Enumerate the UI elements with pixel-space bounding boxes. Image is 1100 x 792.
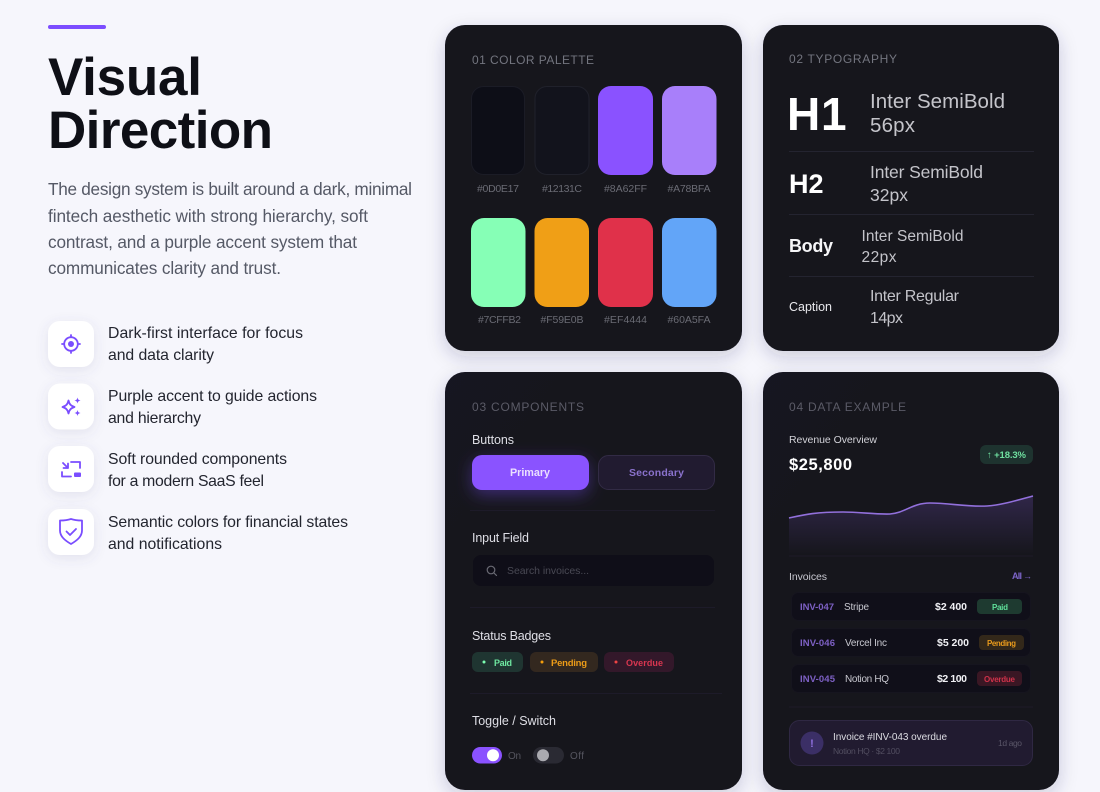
H2 row: H2 bbox=[789, 169, 824, 199]
title: Direction bbox=[48, 101, 273, 160]
swatch #60A5FA: #60A5FA bbox=[668, 314, 710, 326]
primary button bbox=[472, 455, 589, 490]
H1 row: 56px bbox=[870, 114, 916, 137]
area line chart bbox=[789, 496, 1033, 555]
icon: sparkles bbox=[48, 384, 94, 430]
badge: overdue bbox=[604, 652, 674, 672]
badge: overdue: Overdue bbox=[626, 658, 663, 668]
invoices header: All → bbox=[1012, 571, 1032, 581]
swatch #12131C: #12131C bbox=[542, 183, 582, 195]
swatch #0D0E17: #0D0E17 bbox=[477, 183, 519, 195]
invoice row INV-047: INV-047 bbox=[800, 602, 834, 613]
overdue notification: Notion HQ · $2 100 bbox=[833, 746, 900, 756]
badge: pending: Pending bbox=[551, 658, 587, 669]
status badges group: Status Badges bbox=[472, 629, 551, 643]
invoice row INV-045: INV-045 bbox=[800, 674, 836, 685]
feature text bbox=[108, 325, 303, 364]
status badges group bbox=[472, 629, 674, 672]
revenue label: Revenue Overview bbox=[789, 434, 877, 446]
accent bar bbox=[48, 25, 106, 29]
overdue notification: 1d ago bbox=[998, 738, 1022, 748]
feature text: and data clarity bbox=[108, 347, 214, 364]
Body row: 22px bbox=[862, 249, 897, 266]
invoices header: Invoices bbox=[789, 571, 827, 583]
Body row bbox=[789, 228, 964, 266]
panel heading: 03 COMPONENTS bbox=[472, 400, 584, 414]
swatch #F59E0B bbox=[534, 218, 589, 326]
feature: rounded components bbox=[48, 446, 287, 492]
feature text bbox=[108, 514, 348, 553]
secondary button bbox=[598, 456, 714, 490]
panel heading: 02 TYPOGRAPHY bbox=[789, 52, 897, 66]
alert icon: ! bbox=[810, 738, 814, 750]
invoice row INV-045: Notion HQ bbox=[845, 674, 889, 685]
invoice row INV-047: Paid bbox=[992, 603, 1008, 612]
Caption row bbox=[789, 288, 960, 327]
feature text: and notifications bbox=[108, 536, 222, 553]
invoice row INV-045 bbox=[792, 664, 1030, 692]
secondary button: Secondary bbox=[629, 467, 684, 479]
invoice row INV-046: INV-046 bbox=[800, 638, 835, 649]
swatch #0D0E17 bbox=[472, 86, 524, 195]
revenue value: $25,800 bbox=[789, 456, 852, 474]
panel: components bbox=[445, 372, 742, 790]
swatch #F59E0B: #F59E0B bbox=[540, 314, 584, 326]
intro paragraph: contrast, and a purple accent system that bbox=[48, 232, 357, 252]
overdue notification bbox=[790, 720, 1032, 766]
feature: purple accent bbox=[48, 384, 317, 430]
title bbox=[48, 48, 273, 160]
badge: pending bbox=[530, 652, 598, 672]
feature text bbox=[108, 388, 317, 427]
swatch #7CFFB2 bbox=[471, 218, 526, 326]
H1 row bbox=[787, 88, 1005, 140]
panel: data example bbox=[763, 372, 1059, 790]
feature text bbox=[108, 451, 287, 490]
buttons group: Buttons bbox=[472, 433, 514, 447]
intro paragraph: fintech aesthetic with strong hierarchy, soft bbox=[48, 206, 368, 226]
intro paragraph bbox=[48, 179, 412, 278]
panel heading: 04 DATA EXAMPLE bbox=[789, 400, 906, 414]
toggle group: Toggle / Switch bbox=[472, 714, 556, 728]
feature text: Soft rounded components bbox=[108, 451, 287, 468]
search input bbox=[473, 555, 714, 586]
invoice row INV-046 bbox=[792, 628, 1030, 656]
swatch #60A5FA bbox=[662, 218, 716, 326]
invoices header bbox=[789, 571, 1032, 583]
toggle group bbox=[472, 714, 584, 764]
feature text: Dark-first interface for focus bbox=[108, 325, 303, 342]
input field group: Input Field bbox=[472, 531, 529, 545]
title: Visual bbox=[48, 48, 202, 107]
invoice row INV-047 bbox=[792, 592, 1030, 620]
panel: color palette bbox=[445, 25, 742, 351]
search input: Search invoices... bbox=[507, 565, 589, 577]
H2 row bbox=[789, 162, 983, 205]
swatch #EF4444: #EF4444 bbox=[604, 314, 647, 326]
icon: resize frame bbox=[48, 446, 94, 492]
swatch #EF4444 bbox=[598, 218, 653, 326]
overdue notification: Invoice #INV-043 overdue bbox=[833, 732, 947, 743]
icon: shield check bbox=[48, 509, 94, 555]
invoice row INV-046: Pending bbox=[987, 639, 1016, 648]
swatch #A78BFA bbox=[662, 86, 716, 195]
panel: typography bbox=[763, 25, 1059, 351]
input field group bbox=[472, 531, 714, 586]
feature text: Purple accent to guide actions bbox=[108, 388, 317, 405]
H1 row: Inter SemiBold bbox=[870, 90, 1005, 113]
growth badge: ↑ +18.3% bbox=[987, 450, 1027, 461]
invoice row INV-047: $2 400 bbox=[935, 601, 967, 613]
swatch #8A62FF bbox=[598, 86, 653, 195]
swatch #12131C bbox=[535, 86, 589, 195]
H2 row: Inter SemiBold bbox=[870, 162, 983, 182]
feature: dark-first bbox=[48, 321, 303, 367]
Body row: Body bbox=[789, 236, 833, 256]
primary button: Primary bbox=[510, 467, 550, 479]
invoice row INV-045: Overdue bbox=[984, 675, 1016, 684]
left intro column bbox=[48, 25, 412, 555]
Body row: Inter SemiBold bbox=[862, 228, 964, 245]
Caption row: 14px bbox=[870, 310, 903, 327]
H1 row: H1 bbox=[787, 88, 847, 140]
Caption row: Inter Regular bbox=[870, 288, 960, 305]
invoice row INV-047: Stripe bbox=[844, 602, 869, 613]
intro paragraph: The design system is built around a dark, minimal bbox=[48, 179, 412, 199]
alert icon bbox=[800, 732, 824, 754]
badge: paid bbox=[472, 652, 523, 672]
H2 row: 32px bbox=[870, 185, 908, 205]
toggle on: On bbox=[508, 751, 521, 762]
growth badge bbox=[980, 445, 1033, 464]
feature text: Semantic colors for financial states bbox=[108, 514, 348, 531]
swatch #7CFFB2: #7CFFB2 bbox=[478, 314, 521, 326]
feature: semantic colors bbox=[48, 509, 348, 555]
buttons group bbox=[472, 433, 714, 490]
intro paragraph: communicates clarity and trust. bbox=[48, 258, 281, 278]
icon: target bbox=[48, 321, 94, 367]
invoice row INV-046: Vercel Inc bbox=[845, 638, 887, 649]
panel heading: 01 COLOR PALETTE bbox=[472, 53, 594, 67]
badge: paid: Paid bbox=[494, 658, 512, 668]
Caption row: Caption bbox=[789, 300, 832, 314]
invoice row INV-046: $5 200 bbox=[937, 637, 969, 649]
feature text: and hierarchy bbox=[108, 410, 201, 427]
swatch #8A62FF: #8A62FF bbox=[604, 183, 647, 195]
swatch #A78BFA: #A78BFA bbox=[668, 183, 710, 195]
invoice row INV-045: $2 100 bbox=[937, 673, 967, 685]
feature text: for a modern SaaS feel bbox=[108, 473, 264, 490]
toggle off: Off bbox=[570, 751, 584, 762]
